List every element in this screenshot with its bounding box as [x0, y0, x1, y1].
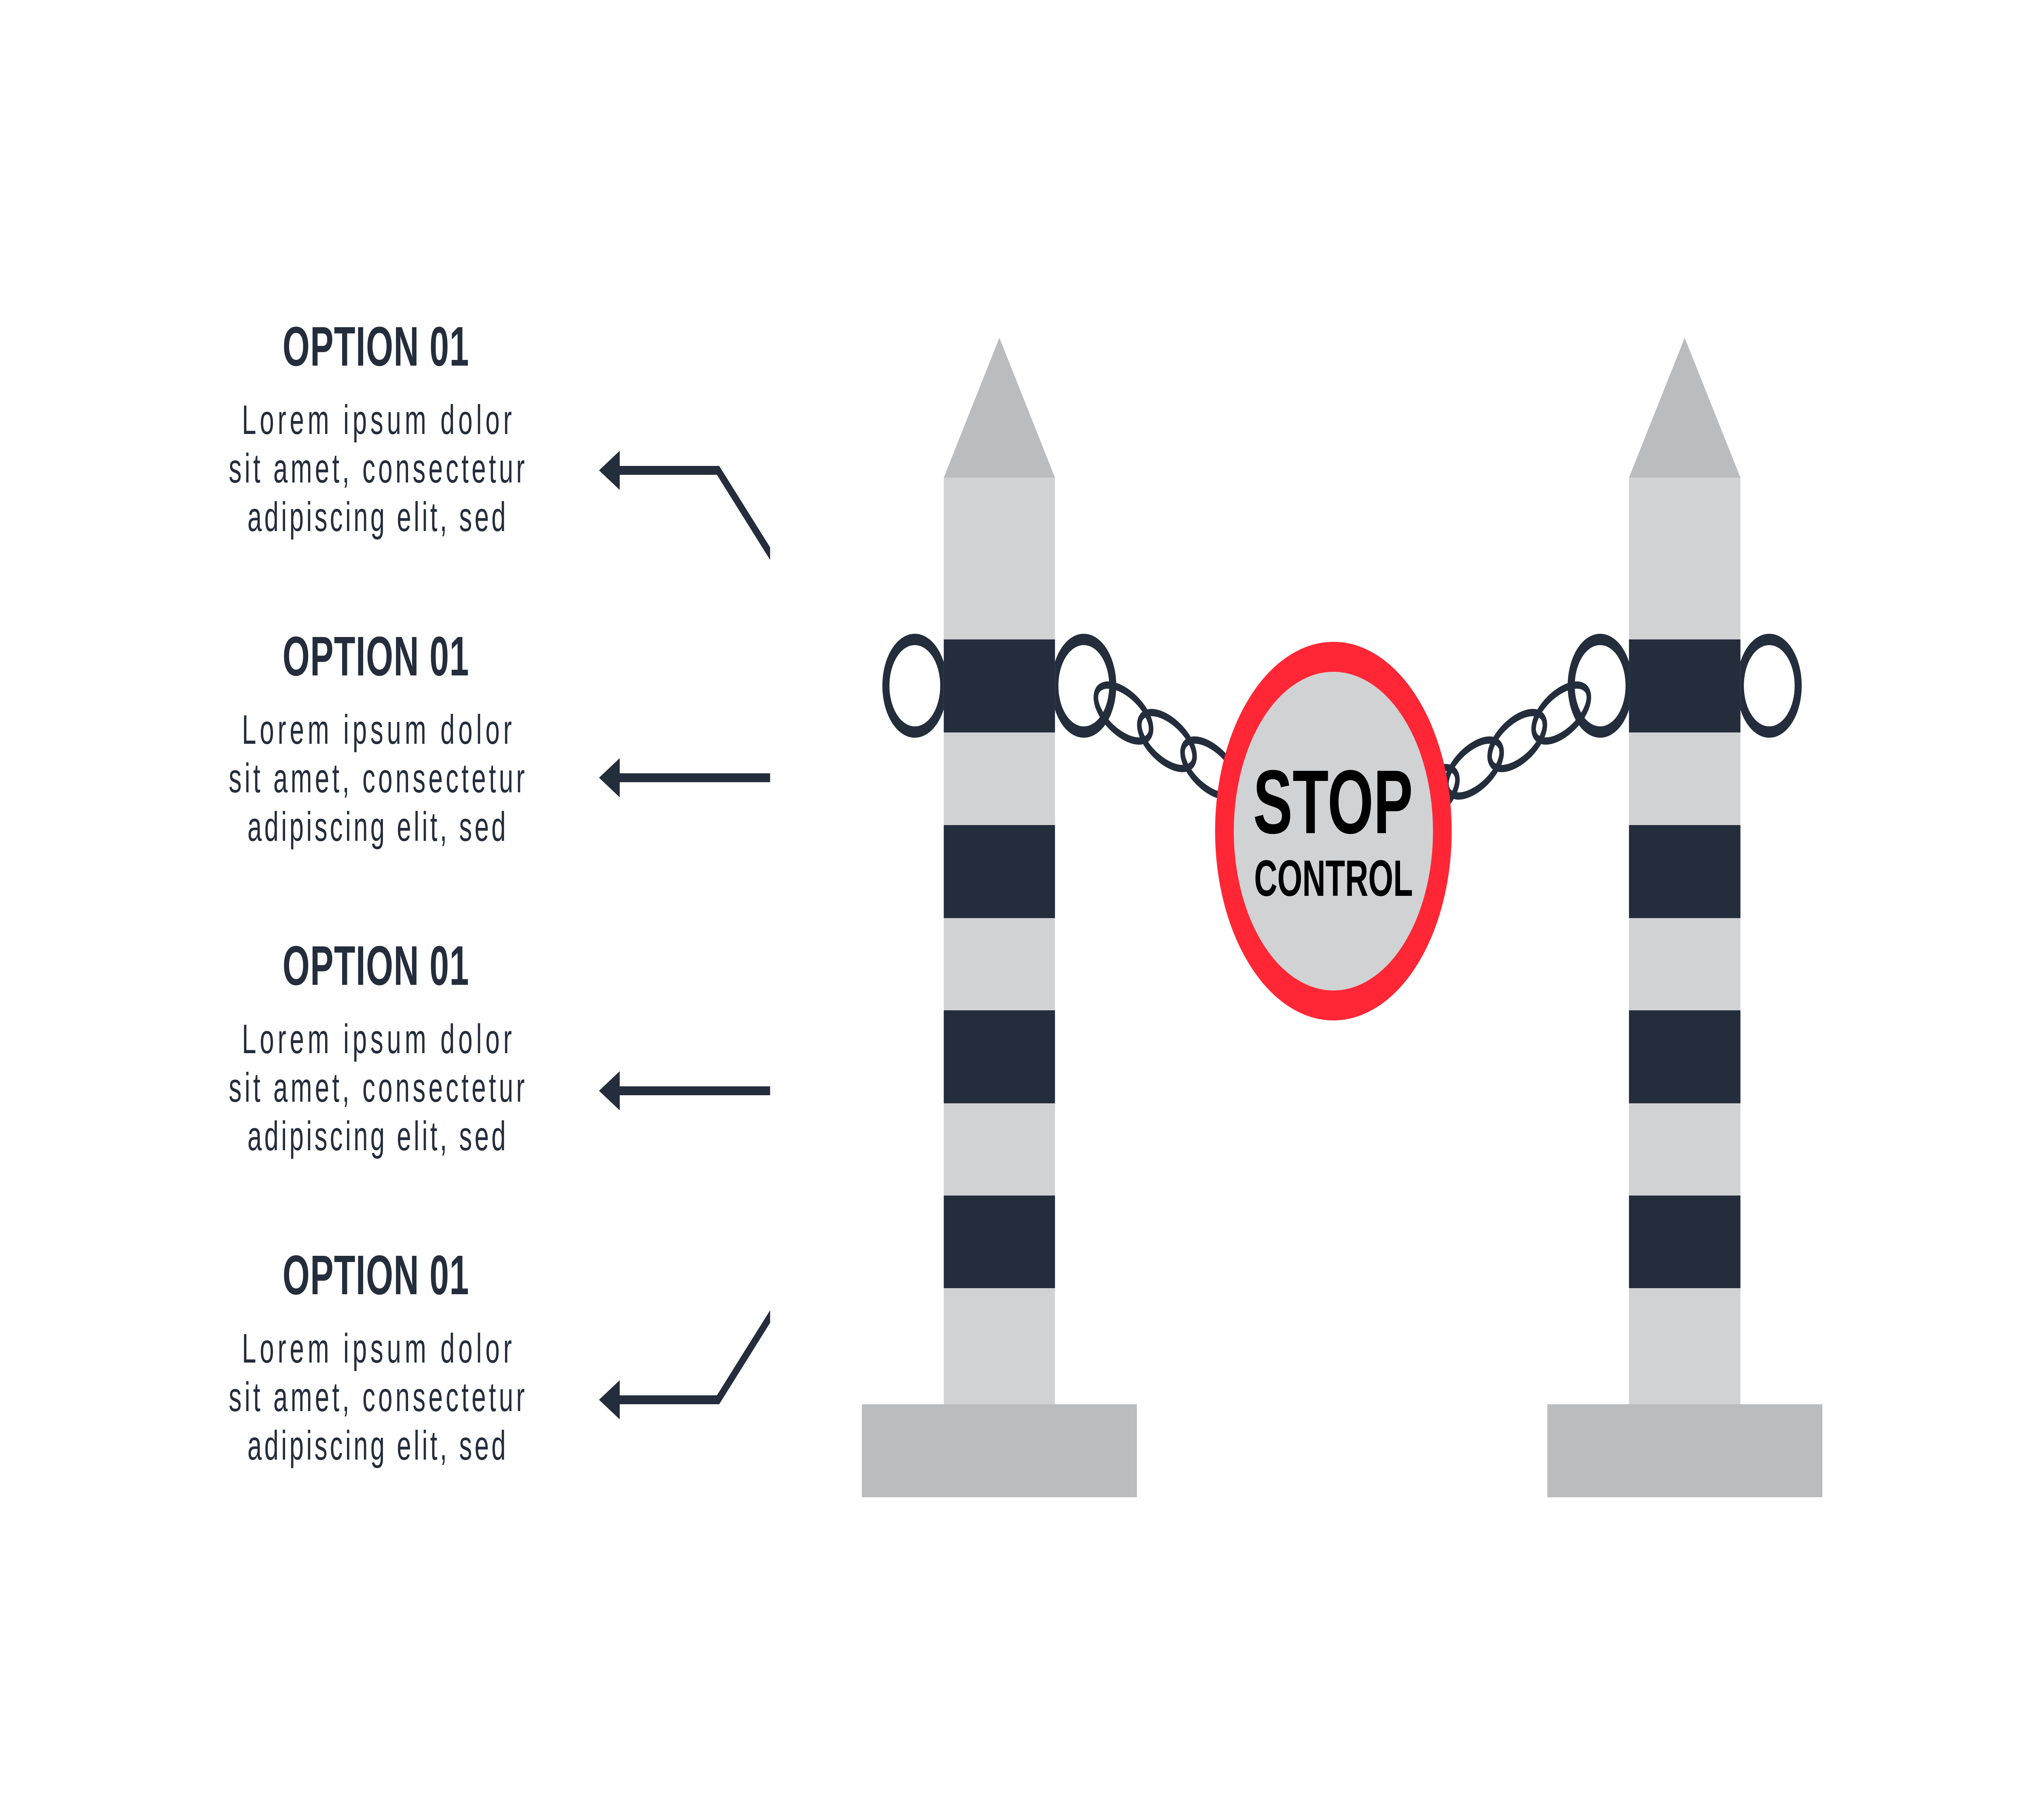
- option 2 heading: OPTION 01: [283, 625, 469, 688]
- right post cap: [1629, 338, 1741, 478]
- left post cap: [944, 338, 1055, 478]
- option 1 body text: adipiscing elit, sed: [247, 494, 506, 540]
- right chain: [1397, 673, 1594, 835]
- sign disc: [1225, 657, 1442, 1005]
- stop sign: [1225, 657, 1442, 1005]
- left post base: [862, 1404, 1137, 1497]
- option 4 body text: [229, 1326, 525, 1469]
- option 1 body text: sit amet, consectetur: [229, 446, 525, 492]
- option 1 body text: [229, 397, 525, 540]
- option 3 body text: adipiscing elit, sed: [247, 1113, 506, 1160]
- option 3 body text: sit amet, consectetur: [229, 1065, 525, 1111]
- left post rings: [886, 639, 1113, 732]
- option 1 heading: OPTION 01: [283, 315, 469, 378]
- option 3 body text: Lorem ipsum dolor: [242, 1016, 512, 1062]
- right post rings: [1571, 639, 1798, 732]
- option 3 text block: [229, 935, 525, 1160]
- right post: [1547, 338, 1822, 1497]
- option 3 heading: OPTION 01: [283, 935, 469, 997]
- left post stripes: [944, 639, 1055, 1288]
- option 4 body text: adipiscing elit, sed: [247, 1423, 506, 1469]
- option 2 text block: [229, 625, 525, 850]
- option 4 heading: OPTION 01: [283, 1244, 469, 1306]
- sign label: [1253, 751, 1413, 907]
- right post base: [1547, 1404, 1822, 1497]
- option 1 body text: Lorem ipsum dolor: [242, 397, 512, 443]
- sign label: STOP: [1253, 751, 1413, 853]
- option 4 text block: [229, 1244, 525, 1469]
- option 2 body text: sit amet, consectetur: [229, 756, 525, 802]
- left post shaft: [944, 478, 1055, 1404]
- option 3 body text: [229, 1016, 525, 1160]
- arrow 1: [599, 451, 778, 566]
- right post stripes: [1629, 639, 1741, 1288]
- option 2 body text: Lorem ipsum dolor: [242, 707, 512, 753]
- arrow 4: [599, 1304, 778, 1420]
- arrow 2: [599, 758, 770, 798]
- right post shaft: [1629, 478, 1741, 1404]
- option 4 body text: sit amet, consectetur: [229, 1374, 525, 1420]
- option 4 body text: Lorem ipsum dolor: [242, 1326, 512, 1372]
- left post: [862, 338, 1137, 1497]
- sign label: CONTROL: [1254, 850, 1413, 907]
- option 2 body text: [229, 707, 525, 850]
- option 2 body text: adipiscing elit, sed: [247, 804, 506, 850]
- arrow 3: [599, 1071, 770, 1111]
- left chain: [1091, 673, 1286, 835]
- option 1 text block: [229, 315, 525, 540]
